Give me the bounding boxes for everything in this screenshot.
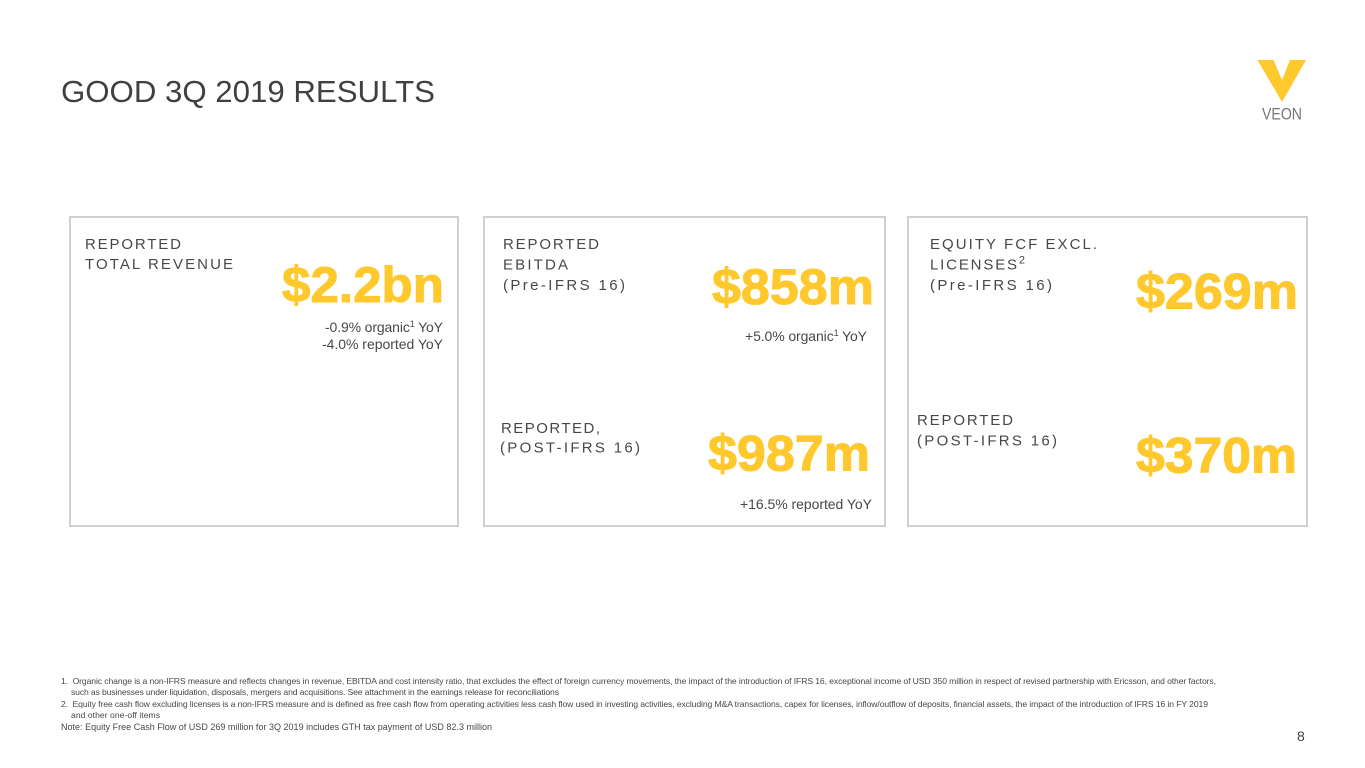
footnotes: 1. Organic change is a non-IFRS measure and reflects changes in revenue, EBITDA and cost intensity ratio, that excludes the effect of foreign currency movements, the impact of the introduction of IFRS 16, exceptional income of USD 350 million in respect of revised partnership with Ericsson, and other factors, xyxy=(61,676,1216,686)
value: $858m: $858m xyxy=(712,259,874,315)
label: equity FCF excl. licenses pre-IFRS 16: EQUITY FCF EXCL. xyxy=(930,236,1097,253)
label: equity FCF excl. licenses pre-IFRS 16: LICENSES xyxy=(930,256,1017,274)
panel: total revenue xyxy=(70,217,458,526)
value: $269m: $269m xyxy=(1136,264,1298,320)
change: revenue YoY xyxy=(322,319,444,352)
label: reported EBITDA pre-IFRS 16: EBITDA xyxy=(503,256,568,274)
label: reported EBITDA pre-IFRS 16: REPORTED xyxy=(503,236,599,253)
change: revenue YoY: YoY xyxy=(415,319,444,335)
change: EBITDA organic YoY: 1 xyxy=(834,328,839,338)
label: reported EBITDA pre-IFRS 16: (Pre-IFRS 16) xyxy=(503,277,625,294)
title: GOOD 3Q 2019 RESULTS xyxy=(61,74,435,109)
label: equity FCF excl. licenses pre-IFRS 16 xyxy=(930,236,1097,294)
change: EBITDA organic YoY: YoY xyxy=(838,328,868,344)
panel: equity FCF xyxy=(908,217,1307,526)
label: reported post-IFRS 16: (POST-IFRS 16) xyxy=(500,440,640,456)
footnotes: such as businesses under liquidation, disposals, mergers and acquisitions. See attachment in the earnings release for reconciliations xyxy=(71,687,559,697)
change: revenue YoY: -0.9% organic xyxy=(325,319,410,335)
value: $987m: $987m xyxy=(708,426,870,482)
icon: VEON logo xyxy=(1258,60,1306,124)
value: $370m: $370m xyxy=(1136,428,1297,484)
label: equity FCF excl. licenses pre-IFRS 16: (Pre-IFRS 16) xyxy=(930,277,1052,294)
label: reported post-IFRS 16: REPORTED, xyxy=(501,420,600,437)
label: reported post-IFRS 16 xyxy=(500,420,640,456)
change: reported YoY: +16.5% reported YoY xyxy=(740,496,873,512)
label: reported EBITDA pre-IFRS 16 xyxy=(503,236,625,294)
footnotes: and other one-off items xyxy=(71,710,160,720)
label: equity FCF excl. licenses pre-IFRS 16: 2 xyxy=(1019,254,1025,266)
label: reported post-IFRS 16: REPORTED xyxy=(917,412,1013,429)
change: EBITDA organic YoY: +5.0% organic xyxy=(745,328,834,344)
value: $2.2bn: $2.2bn xyxy=(282,257,444,313)
panel: EBITDA xyxy=(484,217,885,526)
change: revenue YoY: 1 xyxy=(410,319,415,329)
footnotes xyxy=(61,676,1216,732)
page number: 8 xyxy=(1297,728,1305,744)
label: reported total revenue: TOTAL REVENUE xyxy=(85,256,233,273)
icon: VEON logo: VEON xyxy=(1262,106,1302,124)
change: revenue YoY: -4.0% reported YoY xyxy=(322,336,444,352)
label: reported post-IFRS 16: (POST-IFRS 16) xyxy=(917,432,1057,450)
label: reported total revenue xyxy=(85,236,233,273)
footnotes: 2. Equity free cash flow excluding licenses is a non-IFRS measure and is defined as free cash flow from operating activities less cash flow used in investing activities, excluding M&A transactions, capex for licenses, inflow/outflow of deposits, financial assets, the impact of the introduction of IFRS 16 in FY 2019 xyxy=(61,699,1208,709)
footnotes: Note: Equity Free Cash Flow of USD 269 million for 3Q 2019 includes GTH tax payment of USD 82.3 million xyxy=(61,722,492,732)
label: reported post-IFRS 16 xyxy=(917,412,1057,450)
label: reported total revenue: REPORTED xyxy=(85,236,181,253)
